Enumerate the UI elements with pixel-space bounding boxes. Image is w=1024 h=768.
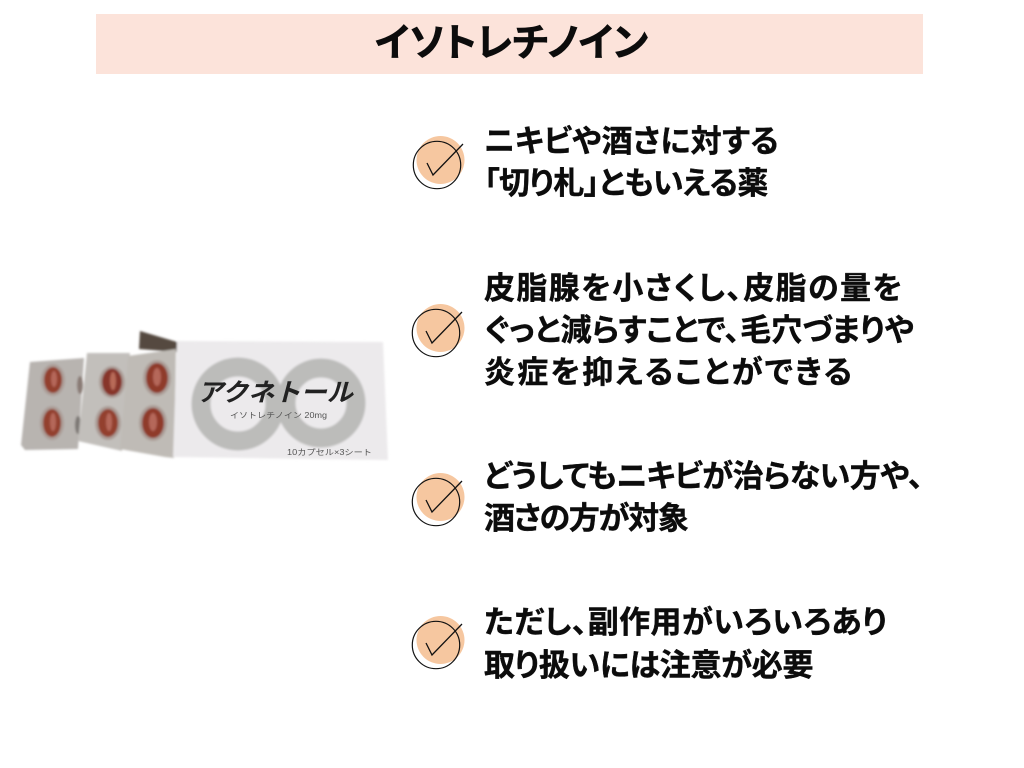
text: point 3: 酒さの方が対象 xyxy=(484,501,688,536)
text: point 1 xyxy=(484,124,779,201)
text: point 2: ぐっと減らすことで、毛穴づまりや xyxy=(484,313,914,348)
icon: check 1 xyxy=(412,136,464,190)
text: point 3: どうしてもニキビが治らない方や、 xyxy=(484,459,923,494)
blister pack middle xyxy=(78,353,130,451)
text: point 4 xyxy=(484,605,887,683)
text: point 4: 取り扱いには注意が必要 xyxy=(484,648,813,683)
carton xyxy=(173,341,388,460)
carton name: アクネトール xyxy=(197,379,354,407)
blister pack left xyxy=(21,358,84,450)
carton quantity: 10カプセル×3シート xyxy=(287,448,372,457)
text: point 2: 炎症を抑えることができる xyxy=(484,355,854,390)
icon: check 4 xyxy=(412,616,464,670)
title xyxy=(96,14,923,74)
text: point 2 xyxy=(484,271,914,390)
icon: check 3 xyxy=(412,473,464,526)
text: point 1: 「切り札」ともいえる薬 xyxy=(484,166,768,201)
icon: check 2 xyxy=(412,304,464,358)
blister pack front xyxy=(120,331,177,458)
text: point 4: ただし、副作用がいろいろあり xyxy=(484,605,887,640)
text: point 2: 皮脂腺を小さくし、皮脂の量を xyxy=(484,271,904,306)
title: イソトレチノイン xyxy=(375,22,648,65)
text: point 3 xyxy=(484,459,923,536)
carton dose: イソトレチノイン 20mg xyxy=(230,411,327,420)
product photo: isotretinoin box with blister packs xyxy=(20,330,388,460)
text: point 1: ニキビや酒さに対する xyxy=(484,124,779,159)
